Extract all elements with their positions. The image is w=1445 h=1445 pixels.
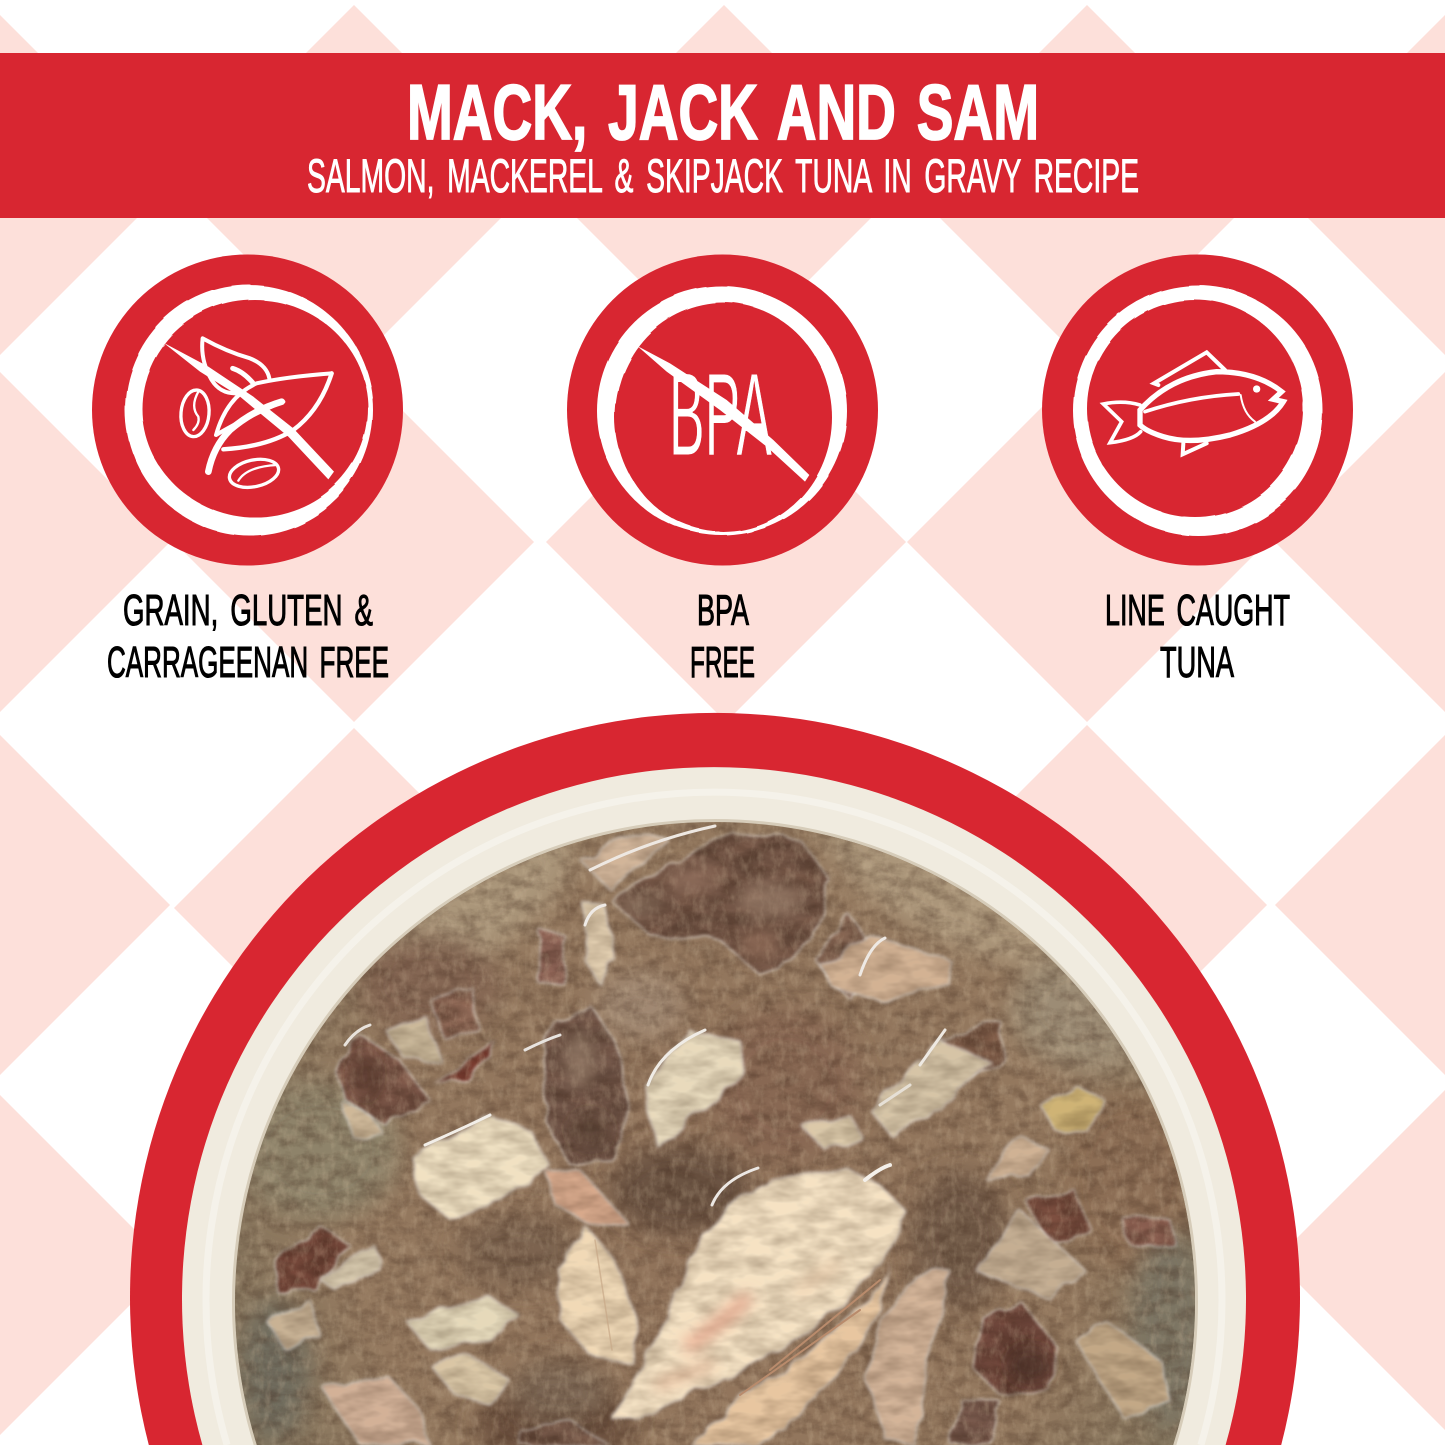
red circle behind bowl [130,713,1300,1445]
icon: BPA free badge: BPA [669,349,772,481]
icon: slash [637,346,809,482]
lumps on dark meat [353,864,1052,1383]
icon: line caught fish badge [1042,254,1353,566]
dark meat flakes [275,830,1175,1445]
header band [0,53,1445,218]
icon: leaves, beans and slash [163,338,334,492]
label: line caught tuna [1105,586,1290,687]
label: grain free: CARRAGEENAN FREE [107,638,389,687]
icon: fish [1103,352,1283,454]
title: MACK, JACK AND SAM [407,68,1039,156]
food photo approximation [230,777,1210,1445]
bowl of food [130,713,1300,1445]
broad tonal patches [240,777,1210,1445]
glossy highlights and flake detail [345,826,945,1395]
label: BPA free: FREE [690,638,755,687]
bowl rim [182,767,1246,1445]
label: grain free: GRAIN, GLUTEN & [123,586,373,635]
label: BPA free [690,586,755,687]
texture overlays [230,820,1200,1445]
label: line caught tuna: TUNA [1160,638,1234,687]
icon: grain free badge [92,254,403,566]
icon: BPA free badge [567,254,878,566]
pink smear on large chunk [660,1265,835,1385]
label: grain free [107,586,389,687]
pale fish chunks [265,830,1170,1445]
label: BPA free: BPA [697,586,749,635]
label: line caught tuna: LINE CAUGHT [1105,586,1290,635]
